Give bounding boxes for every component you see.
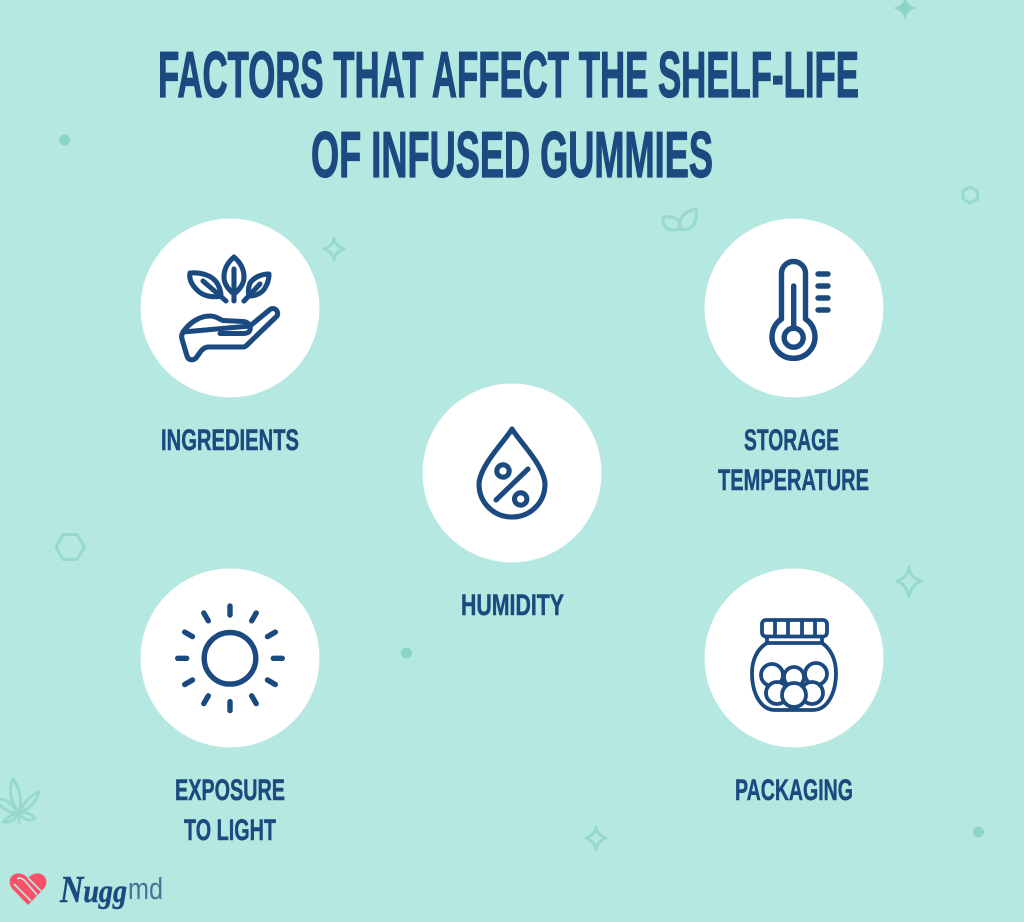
humidity circle — [422, 384, 602, 562]
logo: NuggMD — [10, 869, 163, 911]
panel: ingredients — [140, 218, 320, 457]
icon: striped heart — [10, 873, 46, 905]
decorative hexagon left — [56, 534, 84, 560]
panel: humidity — [422, 384, 602, 622]
label — [718, 424, 869, 497]
icon: percent drop — [479, 429, 545, 517]
label: PACKAGING — [735, 774, 853, 807]
decorative sparkle right — [897, 567, 922, 597]
panel: packaging — [704, 568, 884, 807]
decorative dot center — [401, 648, 412, 658]
decorative sparkle top right — [893, 0, 917, 21]
light circle — [140, 568, 320, 748]
decorative sparkle near ingredients — [324, 238, 344, 260]
wordmark: Nugg — [59, 869, 127, 911]
temperature circle — [704, 218, 884, 398]
label: INGREDIENTS — [161, 424, 299, 457]
label: TEMPERATURE — [718, 464, 869, 497]
icon: sun — [178, 606, 282, 711]
decorative hexagon right — [963, 187, 978, 203]
label: HUMIDITY — [461, 589, 564, 622]
panel: exposure to light — [140, 568, 320, 847]
decorative dot right — [973, 826, 984, 838]
packaging circle — [704, 568, 884, 748]
icon: thermometer — [772, 262, 828, 358]
panel: storage temperature — [704, 218, 884, 497]
wordmark suffix: md — [128, 871, 163, 906]
decorative sparkle bottom — [586, 827, 606, 850]
title: OF INFUSED GUMMIES — [311, 118, 713, 191]
ingredients circle — [140, 218, 320, 398]
decorative cannabis leaf — [0, 779, 39, 822]
icon: gummy jar — [752, 620, 836, 710]
label: TO LIGHT — [184, 814, 276, 847]
label: EXPOSURE — [175, 774, 285, 807]
label — [175, 774, 285, 847]
title — [158, 38, 859, 191]
label: STORAGE — [744, 424, 839, 457]
decorative dot left — [59, 134, 70, 146]
icon: hand holding leaves — [182, 257, 278, 360]
decorative leaves — [663, 209, 696, 230]
